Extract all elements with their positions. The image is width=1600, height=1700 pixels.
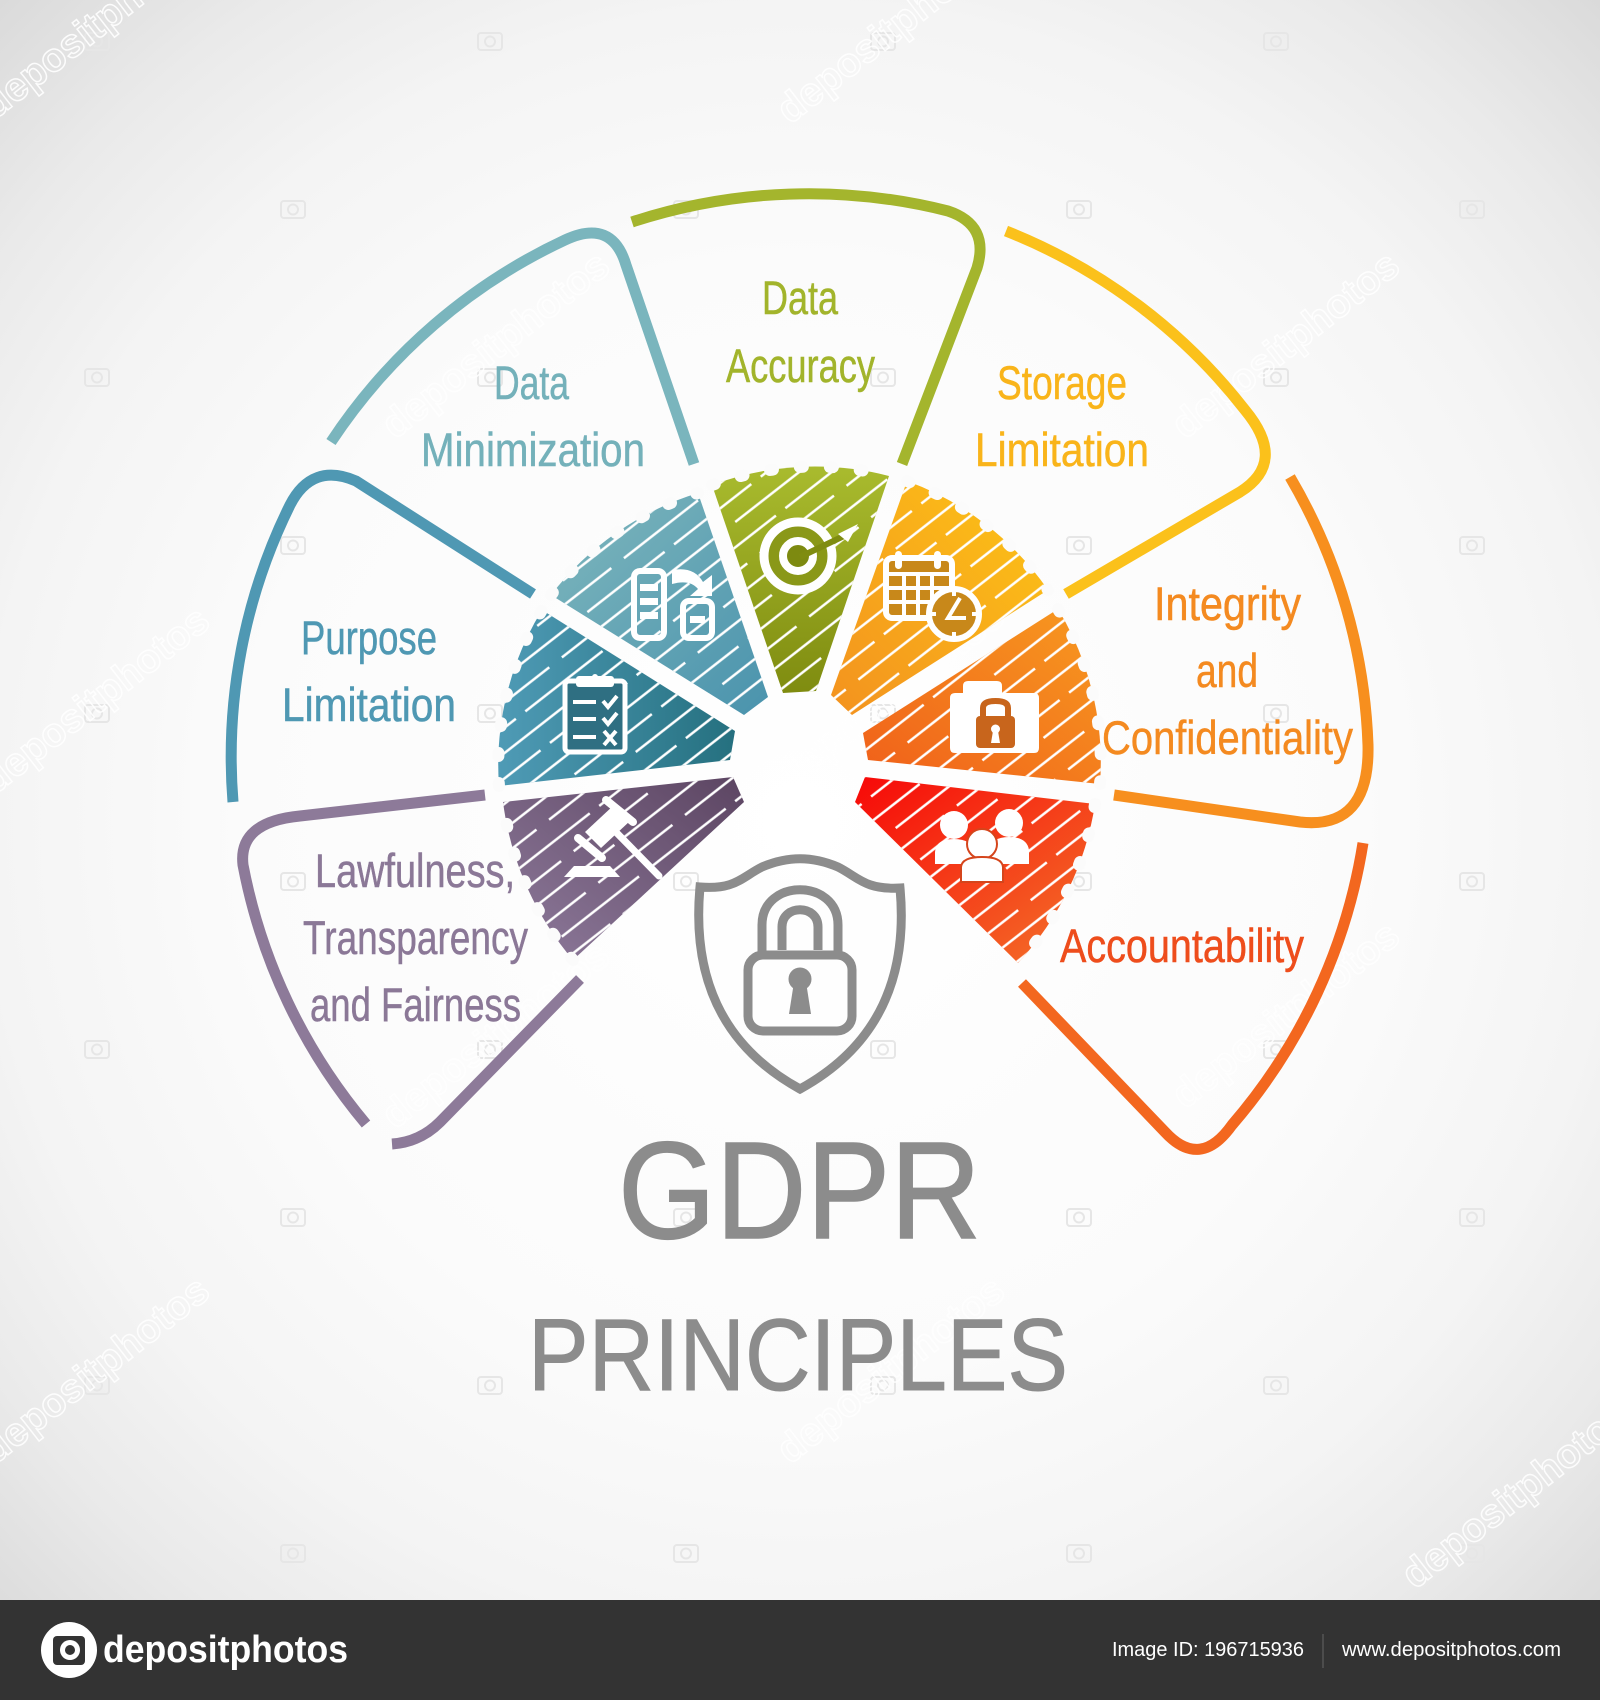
label: purpose limitation: Limitation bbox=[282, 678, 456, 731]
icon: data reduction bbox=[634, 569, 712, 638]
watermarks: depositphotos bbox=[1163, 913, 1408, 1117]
panel: data minimization bbox=[331, 233, 768, 715]
watermarks: depositphotos bbox=[1163, 243, 1408, 447]
outline: data accuracy bbox=[632, 194, 980, 464]
icon: calendar and clock bbox=[886, 551, 979, 639]
outline: purpose limitation bbox=[231, 475, 533, 802]
label: integrity and confidentiality: and bbox=[1196, 644, 1258, 697]
label: lawfulness, transparency and fairness bbox=[303, 844, 528, 1031]
label: lawfulness, transparency and fairness: Lawfulness, bbox=[315, 844, 515, 897]
scribble sector: data minimization bbox=[551, 493, 768, 715]
website url: www.depositphotos.com bbox=[1341, 1639, 1561, 1661]
label: lawfulness, transparency and fairness: and Fairness bbox=[310, 978, 521, 1031]
icon: checklist clipboard bbox=[565, 674, 625, 752]
label: data minimization bbox=[421, 356, 645, 476]
label: storage limitation bbox=[975, 356, 1149, 476]
watermarks: depositphotos bbox=[768, 1268, 1013, 1472]
shield lock icon bbox=[699, 859, 901, 1089]
label: data accuracy: Data bbox=[762, 271, 839, 324]
scribble sector: accountability bbox=[855, 777, 1095, 963]
outline: lawfulness, transparency and fairness bbox=[243, 795, 580, 1144]
title: PRINCIPLES: PRINCIPLES bbox=[528, 1298, 1068, 1412]
watermarks: depositphotos bbox=[373, 933, 618, 1137]
scribble sector: data accuracy bbox=[712, 467, 889, 693]
logo wordmark: depositphotos bbox=[103, 1629, 348, 1671]
scribble sector: purpose limitation bbox=[498, 610, 735, 786]
label: storage limitation: Limitation bbox=[975, 423, 1149, 476]
label: storage limitation: Storage bbox=[997, 356, 1127, 409]
icon: lock folder bbox=[950, 681, 1039, 753]
outline: integrity and confidentiality bbox=[1114, 477, 1368, 823]
label: integrity and confidentiality: Confidentiality bbox=[1102, 711, 1353, 764]
label: lawfulness, transparency and fairness: Transparency bbox=[303, 911, 528, 964]
scribble sector: integrity and confidentiality bbox=[863, 609, 1101, 784]
panel: data accuracy bbox=[632, 194, 980, 693]
label: accountability: Accountability bbox=[1060, 919, 1304, 972]
icon: target bbox=[764, 522, 858, 590]
panel: storage limitation bbox=[831, 231, 1265, 715]
scribble sector: lawfulness bbox=[503, 777, 744, 960]
label: integrity and confidentiality: Integrity bbox=[1154, 577, 1301, 630]
title: GDPR: GDPR bbox=[618, 1114, 981, 1268]
scribble sector: storage limitation bbox=[831, 481, 1048, 715]
watermarks: depositphotos bbox=[768, 593, 1013, 797]
footer bar bbox=[0, 1600, 1600, 1700]
label: data minimization: Minimization bbox=[421, 423, 645, 476]
label: data accuracy bbox=[726, 271, 875, 392]
panel: purpose limitation bbox=[231, 475, 735, 802]
outline: accountability bbox=[1022, 843, 1363, 1149]
label: purpose limitation: Purpose bbox=[301, 611, 437, 664]
watermarks: depositphotos bbox=[373, 243, 618, 447]
image id: Image ID: 196715936 bbox=[1112, 1639, 1304, 1661]
outline: storage limitation bbox=[1006, 231, 1265, 594]
label: data accuracy: Accuracy bbox=[726, 339, 875, 392]
panel: accountability bbox=[855, 777, 1363, 1149]
icon: gavel bbox=[564, 800, 659, 877]
panel: integrity and confidentiality bbox=[863, 477, 1368, 823]
label: purpose limitation bbox=[282, 611, 456, 731]
icon: people bbox=[935, 809, 1029, 882]
label: integrity and confidentiality bbox=[1102, 577, 1353, 764]
panel: lawfulness, transparency and fairness bbox=[243, 777, 744, 1144]
icon: depositphotos logo bbox=[41, 1622, 97, 1678]
outline: data minimization bbox=[331, 233, 694, 464]
label: data minimization: Data bbox=[494, 356, 570, 409]
